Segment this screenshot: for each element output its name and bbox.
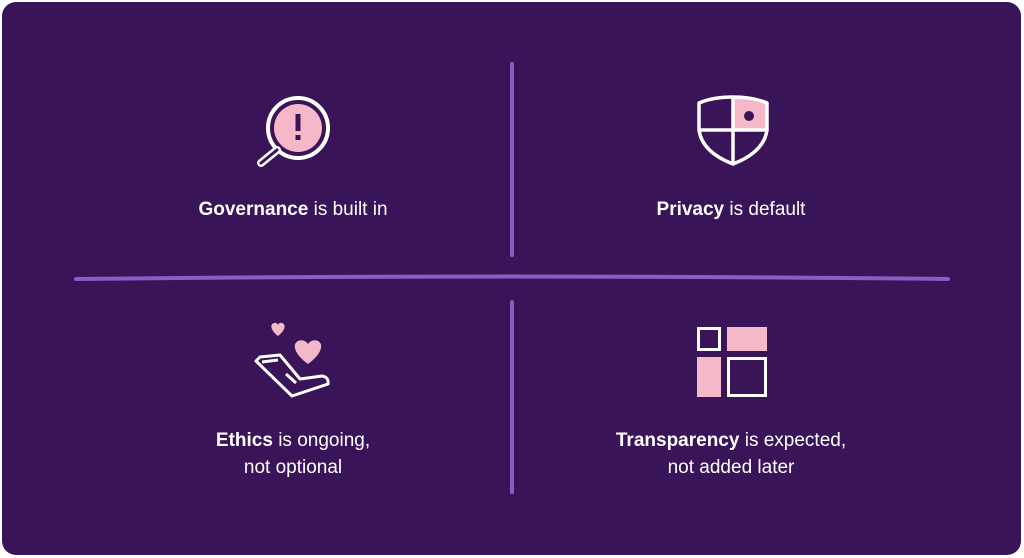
icon: shield — [697, 95, 769, 166]
text: ethics: not optional — [244, 457, 342, 478]
text: governance: Governance is built in — [198, 199, 388, 220]
icon: hand with hearts — [254, 322, 330, 398]
text: transparency — [616, 430, 846, 478]
text: transparency: Transparency is expected, — [616, 430, 846, 451]
text: privacy: Privacy is default — [657, 199, 805, 220]
text: ethics — [216, 430, 370, 478]
text: ethics: Ethics is ongoing, — [216, 430, 370, 451]
icon: magnifier — [257, 96, 330, 167]
text: transparency: not added later — [668, 457, 794, 478]
icon: transparency grid — [697, 327, 767, 397]
